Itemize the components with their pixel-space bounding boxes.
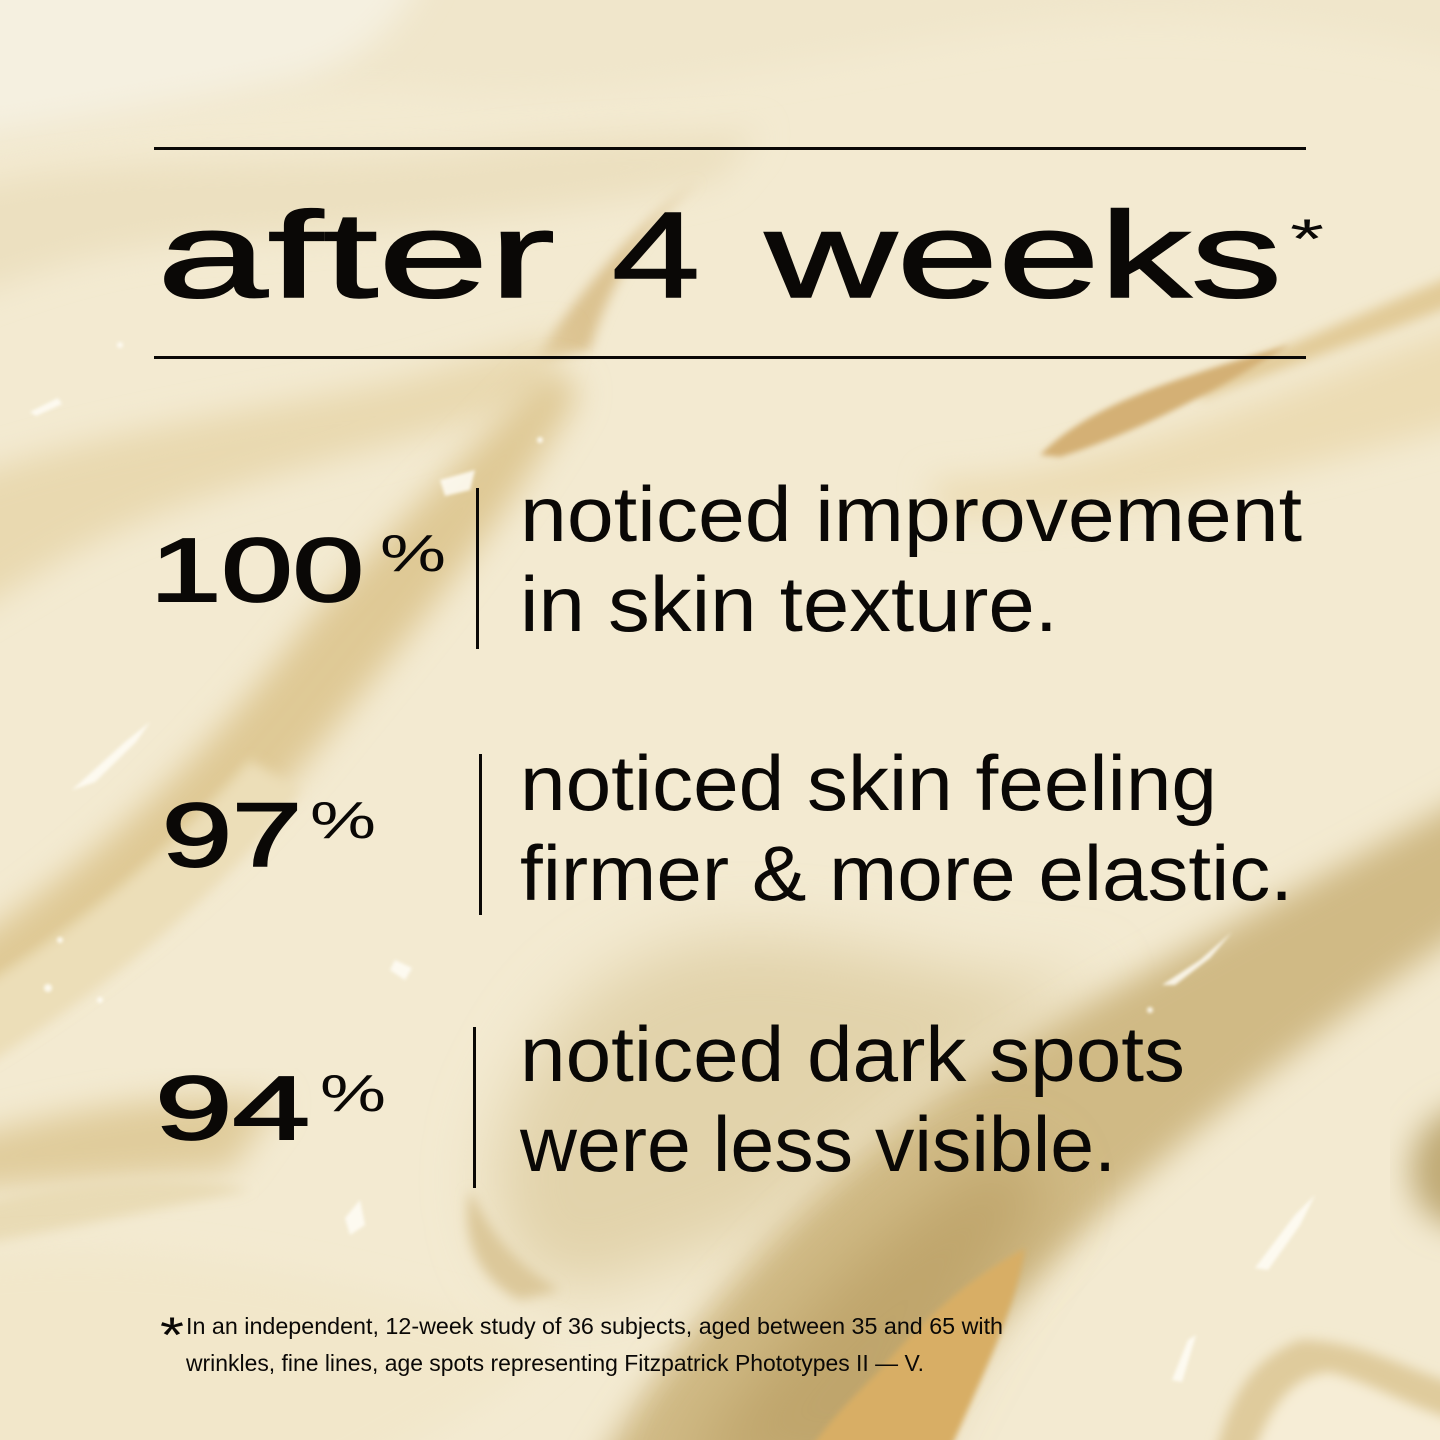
stat: 94%: 94 (155, 1059, 310, 1159)
stat: 100%: noticed improvement (520, 470, 1302, 558)
stat: 94% (155, 1010, 1185, 1188)
title: 4 (612, 187, 700, 323)
stat: 97%: firmer & more elastic. (520, 829, 1293, 917)
bottom rule (154, 356, 1306, 359)
stat: 97%: 97 (162, 786, 302, 886)
footnote (160, 1307, 1003, 1376)
stat: 97% (162, 739, 1293, 917)
stat: 94%: were less visible. (519, 1100, 1116, 1188)
stat: 100%: % (380, 525, 446, 583)
title (157, 187, 1324, 323)
stat: 100% (150, 470, 1302, 649)
footnote: * (160, 1307, 184, 1363)
title: after (157, 187, 555, 323)
highlights: glossy specks (30, 342, 1315, 1382)
footnote: wrinkles, fine lines, age spots representing Fitzpatrick Phototypes II — V. (185, 1350, 924, 1376)
top rule (154, 147, 1306, 150)
stat: 94%: noticed dark spots (520, 1010, 1185, 1098)
footnote: In an independent, 12-week study of 36 subjects, aged between 35 and 65 with (186, 1313, 1003, 1339)
stat: 100%: in skin texture. (520, 560, 1058, 648)
stat: 97%: noticed skin feeling (520, 739, 1217, 827)
title: * (1290, 207, 1324, 270)
stat: 97%: % (310, 792, 376, 850)
stat: 94%: % (320, 1065, 386, 1123)
title: weeks (764, 187, 1282, 323)
stat: 100%: 100 (150, 521, 364, 621)
